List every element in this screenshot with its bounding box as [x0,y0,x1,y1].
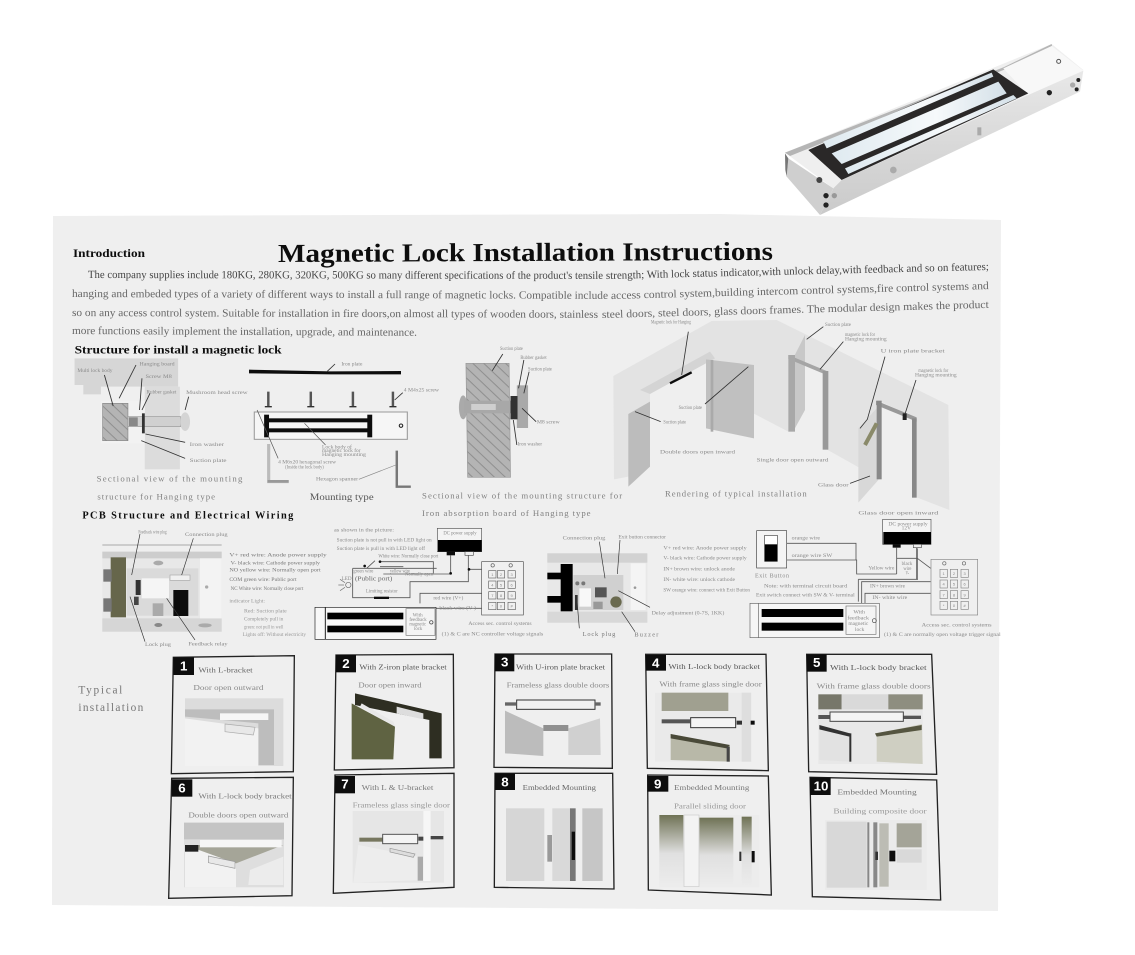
diagram: wiring 2: lock [855,628,865,633]
card 7: Frameless glass single door [353,801,451,810]
text block: wire legend 2 [663,547,751,594]
text block: wire legend 1: V+ red wire: Anode power supply [229,554,328,559]
keypad: 8 [500,593,503,598]
diagram: PCB photo 2: Exit button connector [618,536,667,541]
diagram: wiring 2: Exit Button [755,573,789,579]
diagram: sectional view iron absorption board: Iron absorption board of Hanging type [422,508,591,518]
diagram: mounting type: 4 M6x20 hexagonal screw [278,460,337,465]
card 10: 10 [814,779,828,794]
front face [820,71,1083,215]
diagram: wiring 1: lock [414,627,423,632]
card 6 [169,777,293,898]
diagram: PCB photo 2 [547,536,725,639]
keypad: 1 [943,571,946,576]
keypad: 3 [964,571,967,576]
card 3: 3 [501,655,508,670]
keypad: 5 [953,582,956,587]
card 9: Embedded Mounting [674,783,750,792]
keypad [482,562,523,615]
keypad: 5 [500,582,503,587]
diagram: wiring 2: V- [906,572,909,577]
card 7: With L & U-bracket [362,783,433,792]
diagram: wiring 2: Exit switch connect with SW & V- terminal [756,593,856,598]
diagram: sectional view hanging type [75,358,248,501]
card 5: 5 [813,655,821,670]
diagram: rendering of typical installation: Suction plate [679,406,702,411]
card 7: 7 [341,777,349,792]
card 1 [171,656,294,774]
text block: wire legend 2: V- black wire: Cathode power supply [663,556,747,561]
diagram: sectional view hanging type: Rubber gasket [147,390,177,395]
diagram: PCB photo 1 [102,531,229,648]
heading: typical installation [78,684,144,714]
text block: wire legend 1: NC White wire: Normally close port [231,587,304,592]
diagram: wiring 2: orange wire [792,537,820,542]
card 3 [494,654,612,768]
card 8: 8 [501,774,509,789]
text block: introduction: more functions easily implement the installation, upgrade, and maintenance. [72,325,417,339]
diagram: wiring 1: feedback [409,618,427,623]
right glass door [858,408,878,503]
card 2 [334,654,454,770]
text block: wire legend 1: NO yellow wire: Normally open port [229,569,322,574]
card 4: With L-lock body bracket [668,662,760,671]
diagram: wiring 2: magnetic [848,622,868,627]
keypad: # [511,604,514,609]
diagram: PCB photo 1: Feedback wire plug [138,531,167,536]
diagram: sectional view iron absorption board: Rubber gasket [520,356,547,361]
keypad: 9 [964,592,967,597]
card 7 [333,773,454,893]
diagram: wiring 2: Access sec. control systems [922,624,992,629]
lock [315,607,436,639]
LED [346,582,351,588]
card 6: Double doors open outward [188,810,289,819]
text block: introduction: so on any access control system. Suitable for installation in fire doors,on almost all types of wooden doors, stainless [72,307,598,321]
left double doors [640,352,715,394]
diagram: wiring 1 [315,528,544,639]
diagram: mounting type: 4 M4x25 screw [404,389,440,394]
diagram: rendering of typical installation: Hanging mounting [915,374,957,379]
card 4: 4 [652,656,660,671]
diagram: sectional view hanging type: Suction plate [190,459,227,464]
diagram: rendering of typical installation: magnetic lock for [918,369,949,374]
keypad: 3 [511,572,514,577]
keypad: 7 [943,592,946,597]
diagram: mounting type: (Inside the lock body) [285,466,324,471]
diagram: PCB photo 2: Delay adjustment (0-7S, 1KK) [652,611,725,616]
text block: wire legend 1: Lights off: Without electricity [243,633,307,638]
text block: wire legend 1: green: not pull in well [244,625,284,630]
diagram: wiring 2: IN+ brown wire [870,584,905,589]
text block: wire legend 2: V+ red wire: Anode power supply [663,547,748,552]
diagram: wiring 1: Suction plate is pull in with LED light off [337,547,425,552]
diagram: wiring 2: Note: with terminal circuit board [764,584,848,589]
diagram: wiring 1: (Public port) [355,576,392,583]
card 9: 9 [654,777,661,792]
section: PCB structure left [82,510,544,648]
diagram: wiring 2: 12V [902,527,912,532]
diagram: wiring 1: Limiting resistor [366,590,398,595]
diagram: mounting type: Iron plate [341,362,362,367]
section: PCB structure right [547,519,1002,639]
diagram: sectional view iron absorption board: Iron washer [518,443,543,448]
keypad: 2 [953,571,956,576]
diagram: sectional view iron absorption board [422,347,622,518]
keypad: # [964,603,967,608]
section: typical installation cards, left [78,654,614,898]
diagram: wiring 1: Access sec. control systems [468,622,532,627]
card 9 [647,775,771,895]
diagram: rendering of typical installation: Glass door [818,484,849,489]
diagram: wiring 2: orange wire SW [792,554,833,559]
keypad: * [492,604,494,609]
diagram: wiring 1: black wire (V-) [439,607,477,612]
keypad: 4 [491,582,494,587]
diagram: rendering of typical installation: U iron plate bracket [881,350,946,355]
card 2: 2 [342,656,350,671]
text block: wire legend 1: indicator Light: [229,599,265,604]
diagram: sectional view hanging type: Hanging board [140,362,175,367]
keypad [931,559,978,615]
diagram: wiring 2: wire [903,567,911,572]
diagram: sectional view hanging type: Iron washer [190,443,225,448]
diagram: wiring 1: DC power supply [443,531,477,536]
power supply [437,528,482,552]
diagram: wiring 2: (1) & C are normally open voltage trigger signal [884,633,1002,638]
text block: wire legend 1: Completely pull in [244,617,284,622]
diagram: wiring 1: green wire [353,569,373,574]
diagram: PCB photo 1: Connection plug [185,533,229,538]
card 6: 6 [178,781,186,796]
text block: introduction: steel doors, steel doors, glass doors frames. The modular design makes the product [602,299,989,321]
card 2: With Z-iron plate bracket [359,662,447,671]
panel: instruction sheet [52,214,1002,911]
card 4: With frame glass single door [659,680,762,689]
card 10: Embedded Mounting [837,787,917,796]
diagram: PCB photo 2: Connection plug [563,536,606,541]
diagram: sectional view hanging type: Mushroom head screw [186,391,248,396]
diagram: mounting type [249,362,440,503]
text block: wire legend 1 [229,554,328,638]
lock [750,603,879,638]
diagram: rendering of typical installation [613,320,957,516]
diagram: PCB photo 2: Buzzer [634,632,659,639]
diagram: rendering of typical installation: Magnetic lock for Hanging [651,320,692,325]
card 1: Door open outward [193,683,264,692]
diagram: mounting type: magnetic lock for [322,449,361,454]
diagram: rendering of typical installation: magnetic lock for [845,333,875,338]
text block: introduction: strength; With lock status indicator,with unlock delay,with feedback and so on features; [606,261,989,282]
diagram: wiring 1: LED [342,577,352,582]
section: structure diagrams [75,344,622,518]
diagram: wiring 2: With [853,611,866,616]
caption: Sectional view of the mounting structure for [422,491,622,500]
keypad: * [943,603,945,608]
card 10 [810,777,941,900]
exit button [757,531,787,568]
diagram: mounting type: Hanging mounting [322,453,367,458]
card 5: With frame glass double doors [817,681,931,690]
card 4 [646,654,768,771]
caption: Sectional view of the mounting [97,474,243,484]
card 3: Frameless glass double doors [507,680,609,689]
text block: wire legend 2: SW orange wire: connect with Exit Button [663,589,751,594]
diagram: sectional view hanging type: Multi lock body [77,369,113,374]
power supply [883,519,931,544]
caption: Rendering of typical installation [665,489,807,499]
keypad: 7 [491,593,494,598]
diagram: sectional view iron absorption board: Suction plate [528,368,552,373]
text block: introduction: The company supplies include 180KG, 280KG, 320KG, 500KG so many different specifications of the product's tensile [88,269,603,282]
diagram: wiring 1: magnetic [409,622,426,627]
diagram: rendering of typical installation: Single door open outward [757,459,829,464]
section: typical installation cards, right [646,654,941,900]
heading: structure: Structure for install a magnetic lock [75,344,282,356]
caption: Mounting type [310,492,374,503]
diagram: sectional view iron absorption board: Suction plate [500,347,523,352]
black magnet plate [808,69,1028,180]
keypad: 0 [500,604,503,609]
card 10: Building composite door [833,806,927,815]
keypad: 1 [491,572,494,577]
diagram: PCB photo 1: Feedback relay [188,643,229,648]
text block: wire legend 1: COM green wire: Public port [229,578,298,583]
text block: introduction: hanging and embeded types of a variety of different ways to install a full range of magnetic locks. Compatible include [72,288,608,302]
keypad: 8 [953,592,956,597]
card 8 [494,773,614,889]
keypad: 2 [500,572,503,577]
diagram: rendering of typical installation: Suction plate [825,323,851,328]
text block: wire legend 1: Red: Suction plate [244,610,287,615]
wires [353,555,482,608]
text block: introduction [72,261,989,339]
diagram: wiring 2: DC power supply [888,522,928,527]
diagram: sectional view iron absorption board: M8 screw [537,420,560,425]
card 3: With U-iron plate bracket [516,662,605,671]
heading: typical installation: installation [78,702,144,714]
diagram: rendering of typical installation: Double doors open inward [660,450,736,455]
diagram: wiring 2: IN- white wire [872,596,907,601]
heading: PCB: PCB Structure and Electrical Wiring [82,510,294,521]
diagram: PCB photo 2: Lock plug [583,631,616,638]
top rail highlight [785,44,1052,156]
card 5: With L-lock body bracket [830,663,927,672]
diagram: wiring 1: red wire (V+) [433,597,464,602]
card 5 [807,654,937,774]
text block: introduction: access control system,building intercom control systems,fire control systems and [611,280,989,302]
keypad: 4 [943,582,946,587]
diagram: sectional view hanging type: structure for Hanging type [97,492,215,501]
text block: wire legend 1: V- black wire: Cathode power supply [231,561,321,566]
diagram: wiring 2: black [902,562,913,567]
heading: typical installation: Typical [78,684,122,696]
text block: wire legend 2: IN+ brown wire: unlock anode [663,568,735,573]
card 8: Embedded Mounting [523,783,596,792]
title: Magnetic Lock Installation Instructions [278,237,773,268]
heading: introduction: Introduction [73,246,145,260]
diagram: wiring 2: Yellow wire [868,567,894,572]
diagram: wiring 1: yellow wire [390,569,410,574]
diagram: mounting type: Hexagon spanner [316,478,359,483]
diagram: wiring 2 [750,519,1002,638]
diagram: wiring 1: (1) & C are NC controller voltage signals [442,633,544,638]
diagram: wiring 1: With [413,614,423,619]
icon: magnetic lock product photo [785,44,1083,215]
text block: wire legend 2: IN- white wire: unlock cathode [663,578,735,583]
card 9: Parallel sliding door [674,801,747,810]
keypad: 6 [964,582,967,587]
diagram: mounting type: Lock body of [322,446,352,451]
diagram: rendering of typical installation: Glass door open inward [858,511,940,516]
diagram: wiring 1: as shown in the picture: [334,529,394,534]
diagram: wiring 1: White wire: Normally close port [378,554,439,559]
middle single door [794,335,805,430]
card 1: 1 [180,659,188,674]
card 2: Door open inward [358,680,422,689]
diagram: wiring 1: Suction plate is not pull in with LED light on [337,539,432,544]
diagram: PCB photo 1: Lock plug [145,643,172,648]
keypad: 0 [953,603,956,608]
card 1: With L-bracket [198,665,253,674]
diagram: rendering of typical installation: Suction plate [663,420,686,425]
diagram: wiring 2: feedback [847,617,870,622]
card 6: With L-lock body bracket [198,792,292,801]
keypad: 6 [511,582,514,587]
diagram: rendering of typical installation: Hanging mounting [845,338,887,343]
keypad: 9 [511,593,514,598]
diagram: wiring 1: Normally open [405,572,434,577]
diagram: sectional view hanging type: Screw M8 [145,375,173,380]
